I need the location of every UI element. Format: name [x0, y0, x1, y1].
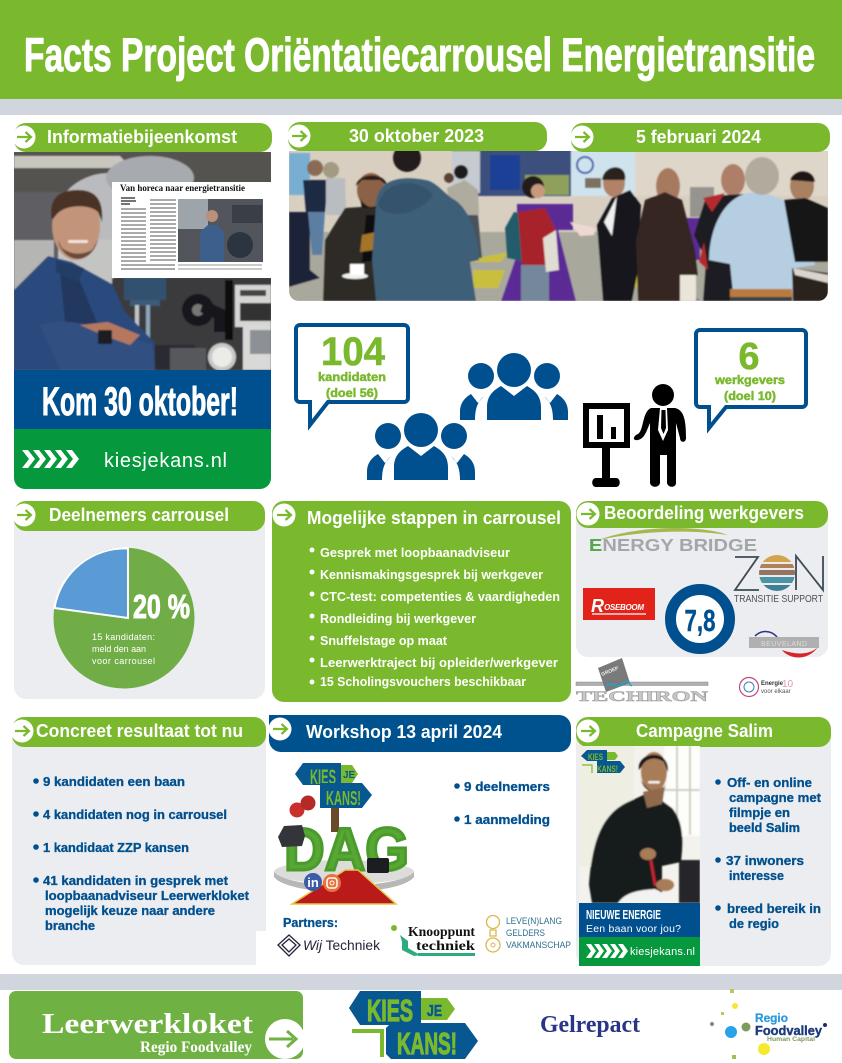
illustration: kies je kans dag: JE	[343, 770, 356, 781]
poster photo: technician in machine room	[14, 152, 271, 371]
footer divider band	[0, 974, 842, 990]
panel: campagne salim	[576, 717, 831, 966]
results list: mogelijk keuze naar andere	[45, 904, 215, 918]
mini logo: kies je kans	[581, 750, 625, 774]
speech bubble: 104 kandidaten: (doel 56)	[326, 386, 378, 400]
left table	[289, 212, 320, 287]
purple carpet	[501, 204, 576, 301]
footer: kies je kans logo: KANS!	[397, 1026, 457, 1061]
icon: candidates group right	[460, 353, 568, 420]
pie chart: 20 %	[133, 588, 190, 625]
logo: roseboom	[583, 588, 655, 620]
logo: knooppunt techniek: Knooppunt	[408, 925, 475, 940]
heading: workshop 13 april 2024	[268, 715, 571, 752]
technician head	[51, 205, 100, 260]
steps list: Leerwerktraject bij opleider/werkgever	[320, 656, 558, 670]
heading: Beoordeling werkgevers	[604, 503, 804, 523]
panel: mogelijke stappen in carrousel	[272, 501, 571, 702]
logo: groep techiron: GROEP	[601, 665, 620, 678]
logo: groep techiron	[576, 658, 708, 705]
footer: regio foodvalley logo: Foodvalley	[755, 1023, 823, 1038]
mini logo: kies je kans: KIES	[588, 752, 603, 762]
icon: presenter with board	[583, 384, 686, 487]
steps list	[310, 546, 560, 689]
partners label: Partners:	[283, 916, 338, 930]
logo: beuvelland: BEUVELAND	[761, 641, 807, 648]
icon: linkedin	[304, 873, 322, 891]
campaign facts	[715, 776, 822, 931]
logo: energy bridge: ENERGY BRIDGE	[589, 535, 757, 555]
man in dark suit	[602, 178, 626, 198]
logo: energie voor elkaar: 10	[782, 679, 794, 690]
illustration: kies je kans dag: KANS!	[326, 788, 361, 810]
man in brown jacket	[656, 168, 680, 204]
results list: branche	[45, 919, 95, 933]
heading: workshop 13 april 2024: Workshop 13 april 2024	[306, 722, 502, 742]
steps list: Snuffelstage op maat	[320, 634, 448, 648]
blue banner	[14, 370, 271, 429]
footer: leerwerkloket: Regio Foodvalley	[140, 1039, 252, 1056]
logo: levenlang gelders vakmanschap: VAKMANSCHAP	[506, 940, 571, 951]
photo: networking event	[289, 151, 828, 301]
logo: roseboom: OSEBOOM	[604, 603, 644, 612]
technician jacket	[14, 256, 155, 370]
logo: energie voor elkaar: voor elkaar	[761, 689, 791, 695]
logo: knooppunt techniek: techniek	[416, 939, 475, 954]
results list	[33, 775, 250, 933]
yellow floor marks	[471, 252, 650, 288]
logo: roseboom: R	[591, 596, 604, 616]
footer: kies je kans logo: JE	[427, 1003, 442, 1020]
score ring	[670, 590, 730, 648]
newspaper clipping	[112, 182, 271, 278]
green banner	[14, 429, 271, 489]
logo: zon transitie support	[734, 555, 823, 605]
footer: leerwerkloket	[9, 991, 305, 1059]
logo: levenlang gelders vakmanschap	[486, 916, 571, 952]
heading	[576, 717, 831, 747]
campaign facts: filmpje en	[729, 806, 790, 820]
heading	[576, 501, 828, 528]
workshop facts: 1 aanmelding	[464, 813, 550, 827]
heading: 5 februari 2024	[570, 123, 830, 152]
footer: regio foodvalley logo	[710, 989, 827, 1059]
steps list: 15 Scholingsvouchers beschikbaar	[320, 675, 526, 689]
campaign facts: 37 inwoners	[726, 854, 804, 868]
heading: Mogelijke stappen in carrousel	[307, 508, 561, 528]
footer: regio foodvalley logo: Regio	[755, 1011, 788, 1025]
illustration: kies je kans dag: DAG	[284, 816, 409, 883]
poster green banner	[579, 937, 700, 966]
blue banner: Kom 30 oktober!	[42, 380, 238, 424]
speech bubble: 6 werkgevers: werkgevers	[714, 373, 785, 387]
workshop facts	[454, 780, 550, 827]
poster green banner: kiesjekans.nl	[630, 946, 695, 958]
logo: energy bridge	[589, 528, 757, 555]
speech bubble: 104 kandidaten: kandidaten	[318, 370, 386, 384]
campaign facts: campagne met	[729, 791, 822, 805]
panel: concreet resultaat tot nu	[10, 717, 266, 965]
pie label: meld den aan	[92, 644, 146, 654]
logo: energy bridge: E	[589, 535, 602, 555]
illustration: kies je kans dag	[274, 763, 414, 904]
campaign facts: breed bereik in	[727, 902, 821, 916]
heading: informatiebijeenkomst: Informatiebijeenkomst	[47, 127, 237, 147]
green banner: kiesjekans.nl	[104, 450, 227, 472]
steps list: CTC-test: competenties & vaardigheden	[320, 590, 560, 604]
footer: regio foodvalley logo: Human Capital	[767, 1037, 815, 1043]
heading: informatiebijeenkomst	[12, 123, 272, 152]
newspaper clipping: Van horeca naar energietransitie	[120, 183, 245, 193]
logo: wij techniek: Wij Techniek	[303, 937, 381, 953]
poster blue banner: Een baan voor jou?	[586, 923, 681, 935]
steps list: Kennismakingsgesprek bij werkgever	[320, 568, 543, 582]
icon: candidates group left	[367, 413, 475, 480]
speech bubble: 104 kandidaten	[296, 325, 408, 425]
panel: beoordeling werkgevers	[576, 501, 828, 658]
score ring: 7,8	[684, 603, 716, 638]
logo: wij techniek	[278, 935, 381, 956]
heading: Campagne Salim	[636, 721, 773, 741]
results list: loopbaanadviseur Leerwerkloket	[45, 889, 250, 903]
heading: deelnemers carrousel	[12, 501, 265, 531]
results list: 1 kandidaat ZZP kansen	[43, 841, 189, 855]
workshop facts: 9 deelnemers	[464, 780, 550, 794]
man in blue coat	[392, 151, 422, 173]
footer: kies je kans logo: KIES	[367, 993, 413, 1028]
heading: deelnemers carrousel: Deelnemers carrousel	[49, 505, 229, 525]
panel: informatiebijeenkomst poster	[12, 123, 272, 489]
man in racing jacket	[721, 164, 745, 196]
logo: energie voor elkaar	[740, 678, 794, 696]
results list: 41 kandidaten in gesprek met	[43, 874, 229, 888]
man at right	[790, 171, 814, 201]
heading: 30 oktober 2023	[288, 122, 547, 151]
mini logo: kies je kans: KANS!	[597, 764, 618, 774]
panel: deelnemers carrousel	[12, 501, 265, 699]
title band	[0, 0, 842, 115]
speech bubble: 6 werkgevers	[696, 330, 806, 428]
logo: beuvelland	[749, 632, 819, 658]
logo: groep techiron: TECHIRON	[576, 689, 708, 705]
steps list: Rondleiding bij werkgever	[320, 612, 476, 626]
campaign facts: de regio	[729, 917, 779, 931]
heading: 5 februari 2024: 5 februari 2024	[636, 127, 761, 147]
speech bubble: 6 werkgevers: 6	[738, 336, 760, 378]
icon: linkedin: in	[307, 875, 319, 890]
background people	[307, 160, 323, 176]
poster blue banner	[579, 903, 700, 937]
poster blue banner: NIEUWE ENERGIE	[586, 907, 661, 922]
pie label: voor carrousel	[92, 656, 155, 666]
logo: levenlang gelders vakmanschap: LEVE(N)LANG	[506, 916, 562, 927]
heading: 30 oktober 2023: 30 oktober 2023	[349, 126, 484, 146]
results list: 4 kandidaten nog in carrousel	[43, 808, 227, 822]
pie label: 15 kandidaten:	[92, 632, 155, 642]
speech bubble: 104 kandidaten: 104	[321, 330, 386, 374]
footer: leerwerkloket: Leerwerkloket	[42, 1008, 253, 1040]
logo: levenlang gelders vakmanschap: GELDERS	[506, 928, 545, 939]
campaign facts: interesse	[729, 869, 784, 883]
steps list: Gesprek met loopbaanadviseur	[320, 546, 510, 560]
results list: 9 kandidaten een baan	[43, 775, 185, 789]
pie label	[92, 632, 155, 666]
footer: kies je kans logo	[349, 991, 478, 1061]
footer: gelrepact logo: Gelrepact	[540, 1012, 640, 1038]
heading: Concreet resultaat tot nu	[36, 721, 243, 741]
campaign facts: Off- en online	[727, 776, 812, 790]
pie chart	[54, 548, 194, 688]
logo: knooppunt techniek	[391, 925, 475, 956]
icon: instagram	[323, 874, 341, 892]
woman in red	[522, 176, 544, 198]
salim figure	[589, 792, 682, 903]
campaign poster	[579, 746, 700, 966]
campaign facts: beeld Salim	[729, 821, 800, 835]
man in light-blue shirt	[709, 193, 815, 293]
speech bubble: 6 werkgevers: (doel 10)	[724, 389, 776, 403]
seated man	[322, 206, 377, 301]
heading	[10, 717, 266, 747]
logo: zon transitie support: TRANSITIE SUPPORT	[734, 593, 823, 605]
logo: energie voor elkaar: Energie	[761, 681, 784, 687]
illustration: kies je kans dag: KIES	[310, 766, 336, 789]
